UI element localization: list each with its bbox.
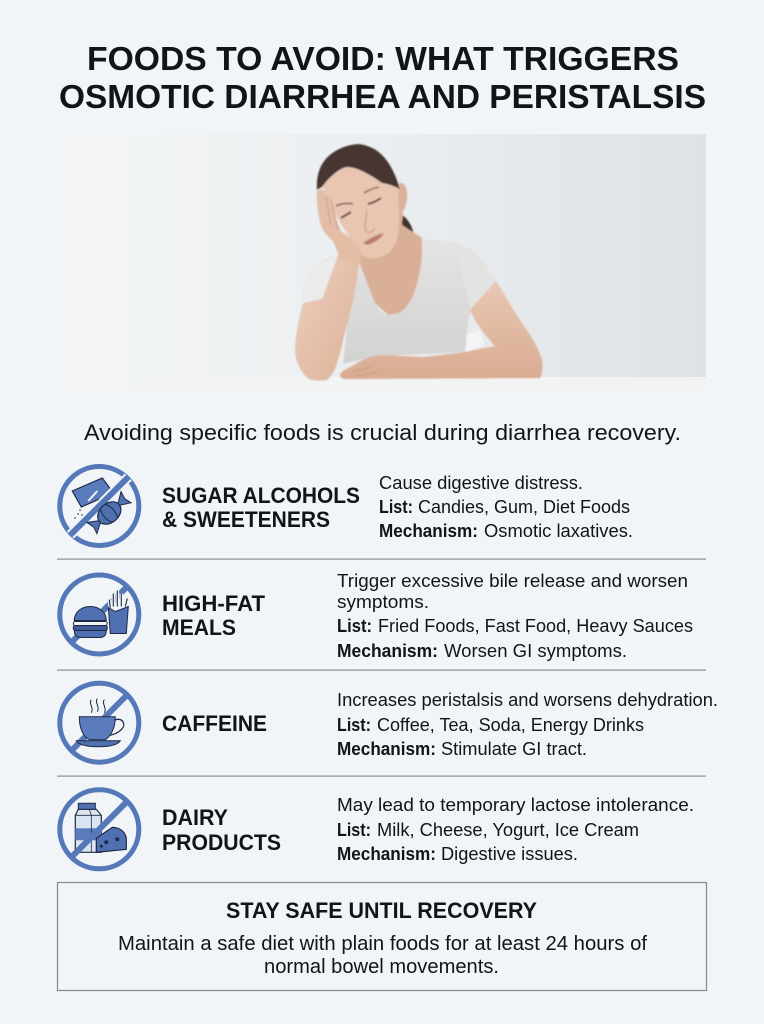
description: Mechanism: (379, 520, 478, 541)
label (162, 805, 281, 855)
description: Worsen GI symptoms. (444, 640, 627, 661)
callout: stay safe: Maintain a safe diet with plain foods for at least 24 hours of (118, 933, 647, 955)
panel: sugar alcohols (60, 466, 633, 546)
description: Increases peristalsis and worsens dehydration. (337, 689, 718, 710)
description: May lead to temporary lactose intolerance. (337, 794, 694, 815)
label: & SWEETENERS (162, 507, 330, 532)
icon: no fast food (60, 575, 139, 654)
ear (399, 183, 407, 214)
description: Mechanism: (337, 843, 436, 864)
face (322, 167, 404, 258)
description: Mechanism: (337, 738, 436, 759)
description: List: (379, 496, 413, 517)
description: Cause digestive distress. (379, 472, 583, 493)
facial features (336, 187, 379, 206)
label: HIGH-FAT (162, 591, 265, 616)
photo: tired woman at table (58, 134, 706, 393)
description: Trigger excessive bile release and worsen (337, 570, 688, 591)
title (59, 40, 706, 115)
callout: stay safe: STAY SAFE UNTIL RECOVERY (226, 898, 537, 923)
label: PRODUCTS (162, 830, 281, 855)
label (162, 483, 360, 532)
title: FOODS TO AVOID: WHAT TRIGGERS (87, 40, 679, 77)
description: Candies, Gum, Diet Foods (418, 496, 630, 517)
neck and chest (356, 225, 422, 315)
description: Milk, Cheese, Yogurt, Ice Cream (377, 819, 639, 840)
description: List: (337, 819, 371, 840)
description: List: (337, 714, 371, 735)
hand on head (317, 189, 361, 264)
icon: no sweeteners (60, 466, 139, 546)
label: MEALS (162, 615, 236, 640)
description (337, 570, 693, 661)
panel: dairy (60, 790, 694, 869)
icon: no coffee (60, 683, 139, 762)
hair (317, 144, 400, 190)
icon: no dairy (60, 790, 139, 869)
callout: stay safe: normal bowel movements. (264, 956, 499, 978)
chair hint (465, 330, 484, 352)
label: CAFFEINE (162, 711, 267, 736)
panel: high-fat meals (60, 570, 693, 661)
description: Osmotic laxatives. (484, 520, 633, 541)
description: symptoms. (337, 591, 429, 612)
description: Coffee, Tea, Soda, Energy Drinks (377, 714, 644, 735)
description (337, 794, 694, 864)
shirt (301, 239, 497, 364)
panel: caffeine (60, 683, 718, 762)
description: Mechanism: (337, 640, 438, 661)
label (162, 591, 265, 640)
intro sentence: Avoiding specific foods is crucial during diarrhea recovery. (84, 420, 681, 445)
ponytail (401, 214, 414, 237)
label: SUGAR ALCOHOLS (162, 483, 360, 508)
title: OSMOTIC DIARRHEA AND PERISTALSIS (59, 78, 706, 115)
description: Digestive issues. (441, 843, 578, 864)
label: DAIRY (162, 805, 228, 830)
right arm and hand (340, 281, 542, 379)
description (337, 689, 718, 759)
description (379, 472, 633, 541)
callout: stay safe (58, 882, 706, 990)
description: Stimulate GI tract. (441, 738, 587, 759)
description: List: (337, 615, 372, 636)
left arm (295, 253, 361, 381)
description: Fried Foods, Fast Food, Heavy Sauces (378, 615, 693, 636)
